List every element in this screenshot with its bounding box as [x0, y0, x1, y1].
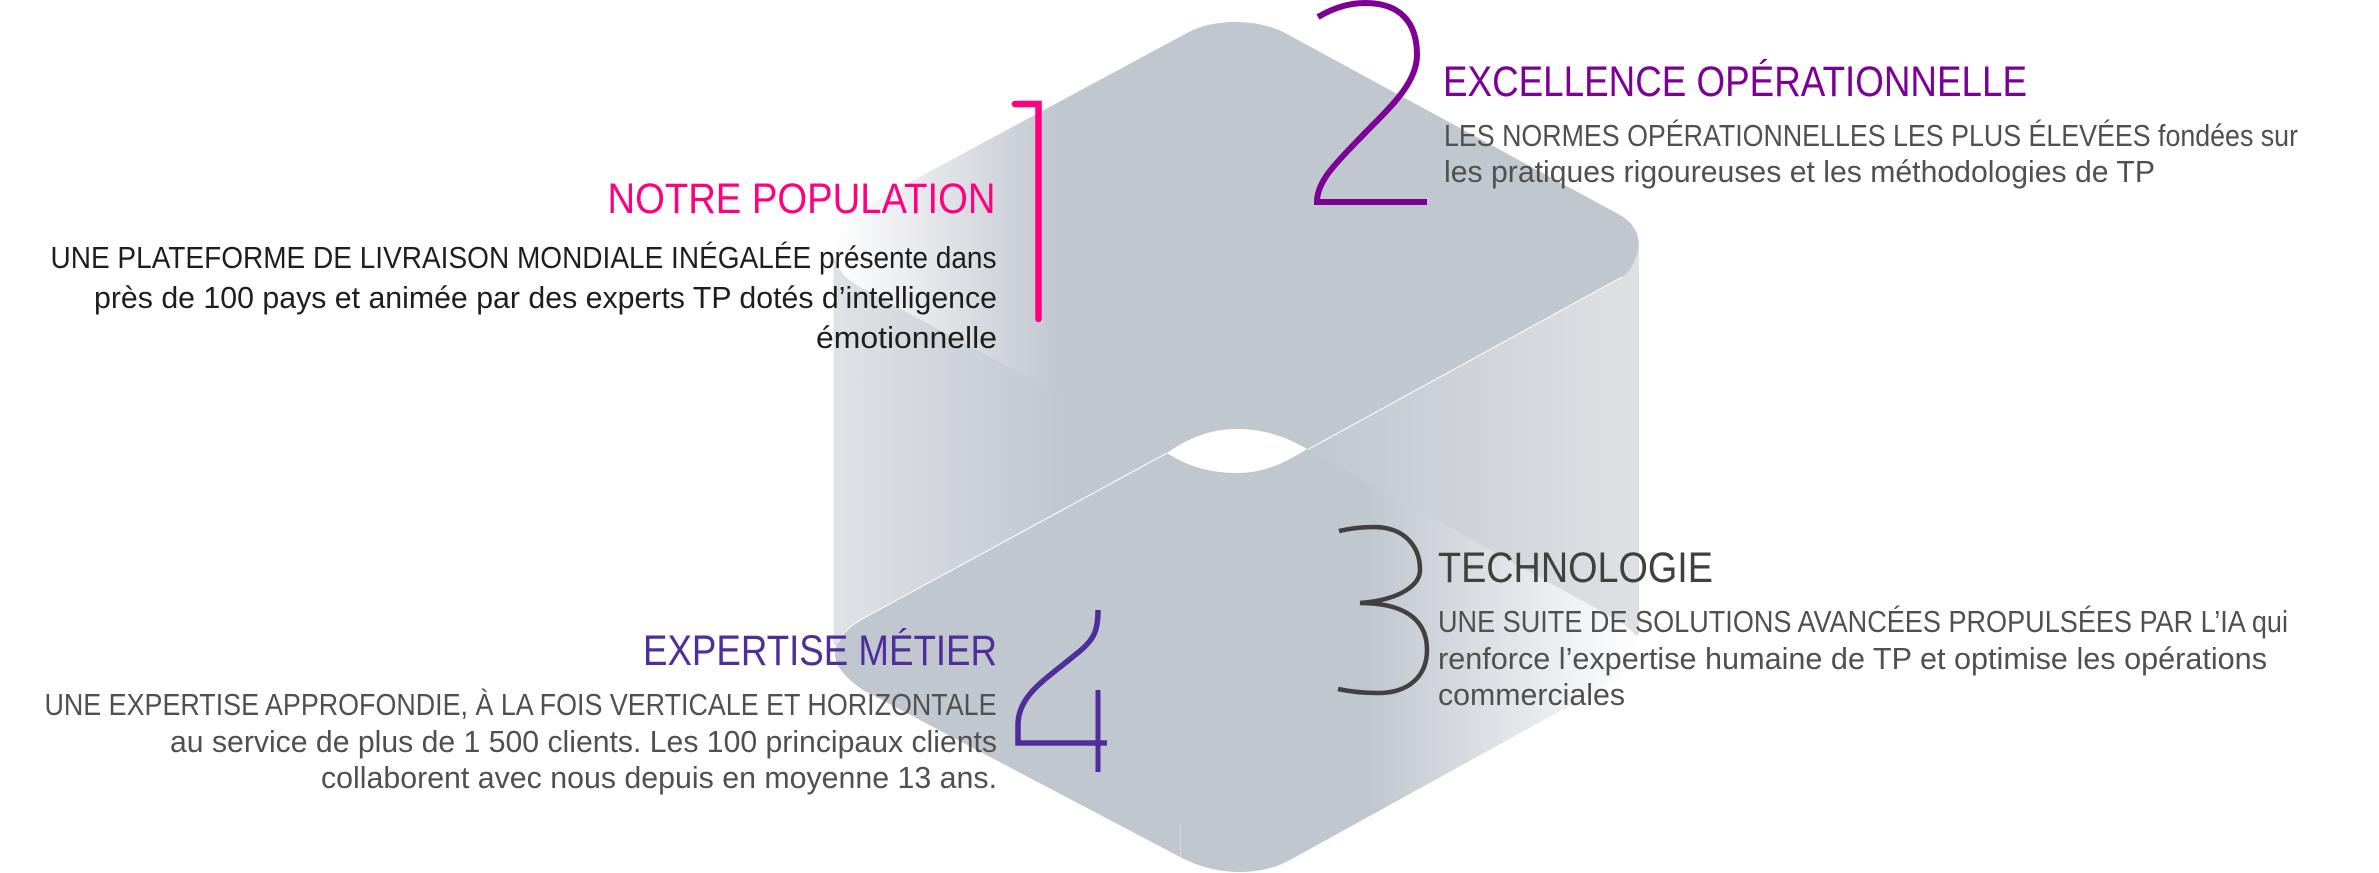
body text 4: UNE EXPERTISE APPROFONDIE, À LA FOIS VERTICALE ET HORIZONTALE: [44, 687, 996, 722]
block 4: expertise metier: [44, 627, 997, 795]
body text 3: [1438, 604, 2288, 712]
block 2: excellence operationnelle: [1443, 58, 2298, 189]
heading 4: EXPERTISE MÉTIER: [643, 627, 997, 675]
right ribbon band: [1236, 240, 1639, 635]
body text 4: au service de plus de 1 500 clients. Les 100 principaux clients: [170, 724, 997, 759]
body text 4: [44, 687, 997, 795]
centre opening: [1167, 429, 1307, 473]
body text 4: collaborent avec nous depuis en moyenne 13 ans.: [321, 760, 997, 795]
bottom diamond: [835, 431, 1640, 872]
heading 1: NOTRE POPULATION: [608, 175, 996, 223]
body text 2: [1444, 118, 2298, 189]
body text 3: commerciales: [1438, 677, 1625, 712]
top diamond: [834, 22, 1638, 469]
body text 2: les pratiques rigoureuses et les méthodologies de TP: [1444, 154, 2155, 189]
block 1: notre population: [50, 175, 997, 355]
ribbon shape: [834, 22, 1640, 872]
left ribbon band: [834, 258, 1244, 645]
body text 1: [50, 240, 997, 355]
heading 3: TECHNOLOGIE: [1438, 544, 1713, 592]
body text 1: près de 100 pays et animée par des experts TP dotés d’intelligence: [94, 280, 997, 315]
body text 1: UNE PLATEFORME DE LIVRAISON MONDIALE INÉGALÉE présente dans: [50, 240, 996, 275]
body text 1: émotionnelle: [816, 320, 997, 355]
numeral 4: [1018, 610, 1107, 772]
numeral 2: [1317, 3, 1427, 202]
heading 2: EXCELLENCE OPÉRATIONNELLE: [1443, 58, 2027, 106]
seam highlights: [838, 277, 1622, 857]
block 3: technologie: [1438, 544, 2288, 712]
body text 3: renforce l’expertise humaine de TP et optimise les opérations: [1438, 641, 2267, 676]
numeral 3: [1338, 527, 1427, 693]
numeral 1: [1015, 104, 1038, 319]
